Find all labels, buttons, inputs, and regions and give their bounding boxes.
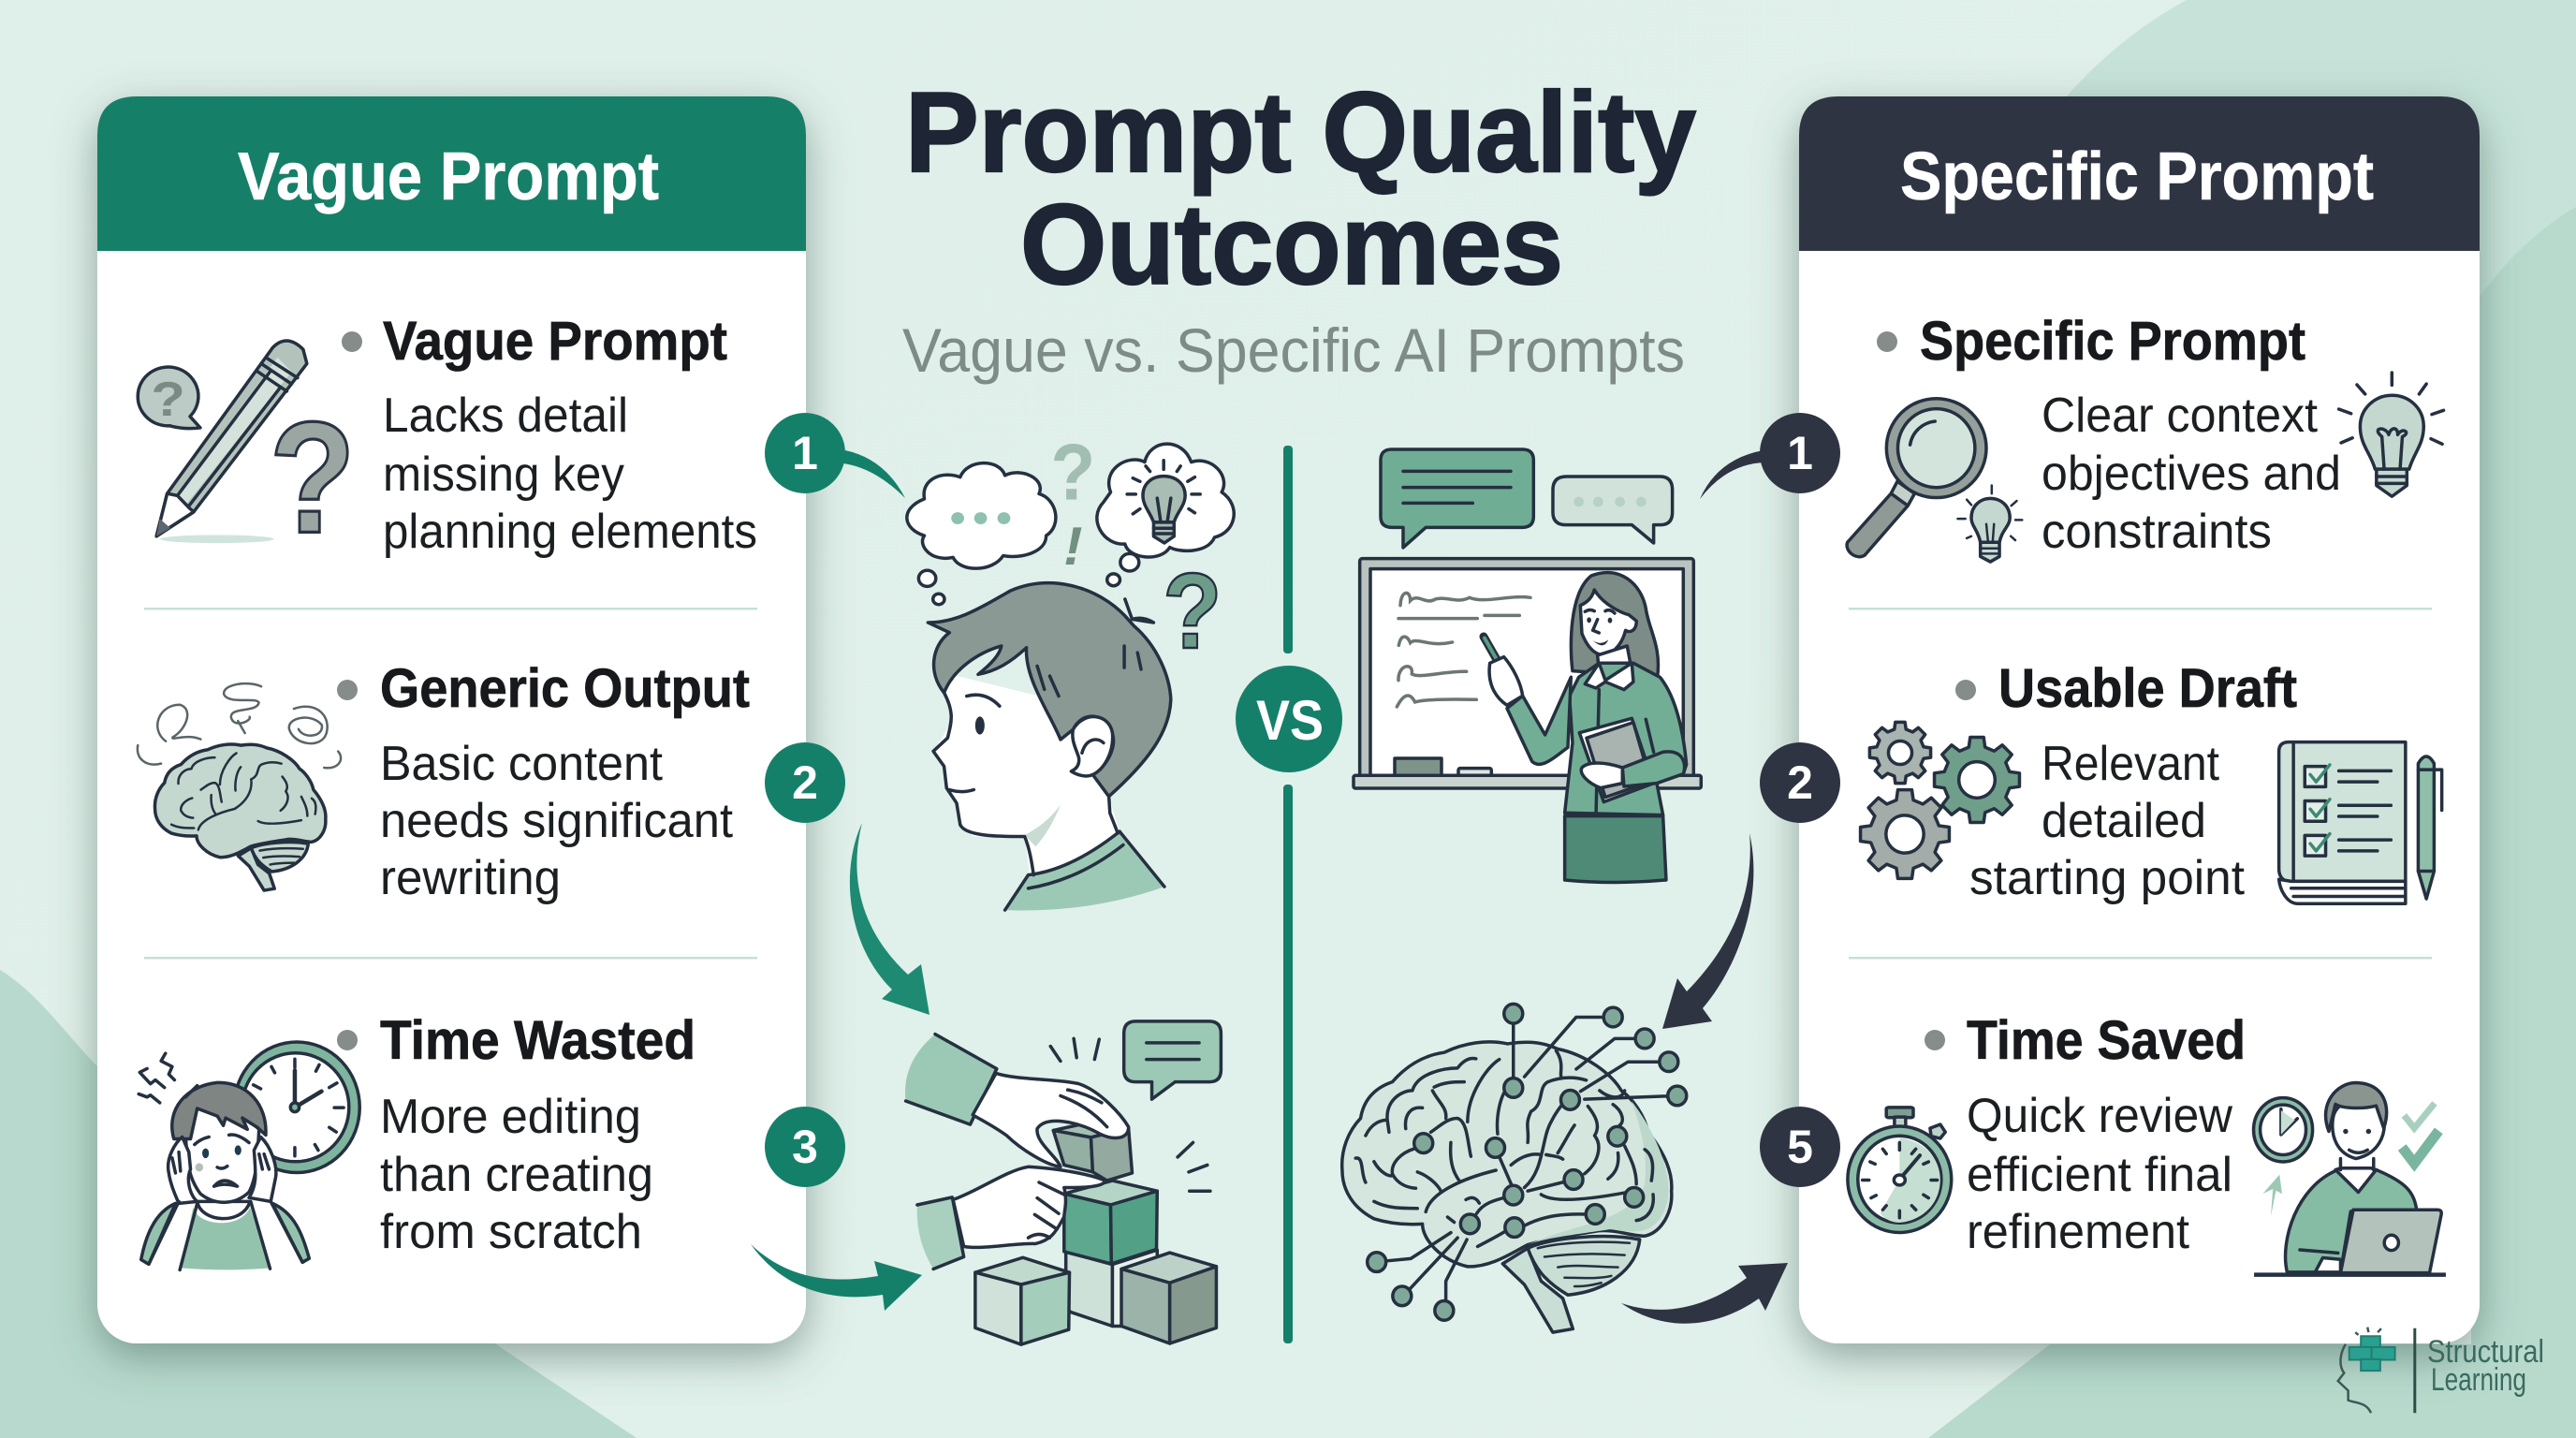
- item: usable draft text: starting point: [1969, 851, 2246, 905]
- item: time wasted text: [337, 1010, 695, 1259]
- divider lines: [144, 608, 757, 959]
- speech bubble small: [1553, 477, 1673, 543]
- badge: left 3: 3: [792, 1121, 818, 1173]
- title: Outcomes: [1020, 181, 1563, 308]
- badge: right 5: 5: [1787, 1121, 1813, 1173]
- item: time wasted text: Time Wasted: [380, 1010, 695, 1071]
- VS badge: VS: [1256, 689, 1324, 752]
- badge: right 1: 1: [1787, 427, 1813, 479]
- item: usable draft text: Usable Draft: [1998, 658, 2297, 719]
- illustration: thinking boy: ?: [1163, 552, 1222, 671]
- item: generic output text: [337, 658, 750, 905]
- lower hand: [917, 1167, 1105, 1269]
- illustration: connected brain: [1342, 1004, 1687, 1332]
- item: vague prompt text: Vague Prompt: [383, 311, 727, 372]
- badge: left 1: [765, 413, 845, 493]
- VS badge: [1236, 666, 1342, 772]
- panel header: vague prompt: [97, 96, 806, 251]
- item: vague prompt text: [342, 311, 757, 559]
- item: vague prompt text: missing key: [383, 448, 624, 502]
- item: usable draft text: [1955, 658, 2297, 905]
- badge: left 2: [765, 742, 845, 823]
- icon: pencil with question marks: ?: [270, 389, 356, 566]
- title: [905, 68, 1696, 308]
- cube: bottom left: [975, 1257, 1070, 1344]
- item: specific prompt text: constraints: [2042, 505, 2272, 559]
- icon: stopwatch: [1848, 1108, 1952, 1233]
- icon: magnifier and lightbulbs: [1847, 373, 2444, 562]
- item: specific prompt text: Clear context: [2042, 389, 2319, 443]
- arrow: right 2 to brain: [1662, 833, 1753, 1029]
- logo: structural learning: Learning: [2431, 1362, 2526, 1398]
- network nodes: [1368, 1004, 1687, 1320]
- icon: pencil with question marks: [138, 341, 356, 566]
- logo: structural learning: Structural: [2427, 1334, 2544, 1370]
- arrow: left 3 to blocks: [751, 1244, 922, 1311]
- item: usable draft text: detailed: [2042, 794, 2206, 848]
- panel header: vague prompt: Vague Prompt: [238, 139, 659, 214]
- badge: right 5: [1760, 1107, 1840, 1187]
- icon: notebook and pen: [2279, 742, 2442, 903]
- thought cloud with dots: [907, 463, 1056, 605]
- item: time wasted text: than creating: [380, 1148, 653, 1202]
- icon: gears: [1861, 722, 2019, 878]
- boy shirt: [1005, 831, 1164, 910]
- badge: right 2: [1760, 742, 1840, 823]
- speech bubble: [1124, 1021, 1221, 1099]
- item: specific prompt text: [1877, 311, 2341, 559]
- panel: specific prompt: [1799, 96, 2480, 1343]
- icon: stressed person and clock: [139, 1042, 359, 1269]
- speech bubble large: [1381, 449, 1533, 548]
- panel header: specific prompt: [1799, 96, 2480, 251]
- illustration: thinking boy: !: [1063, 516, 1083, 577]
- center divider with VS: [1236, 446, 1342, 1343]
- item: time saved text: refinement: [1967, 1205, 2190, 1259]
- logo: structural learning: [2338, 1328, 2544, 1413]
- icon: pencil with question marks: ?: [151, 372, 185, 426]
- item: specific prompt text: Specific Prompt: [1920, 311, 2305, 372]
- panel header: specific prompt: Specific Prompt: [1900, 139, 2374, 214]
- subtitle: Vague vs. Specific AI Prompts: [902, 315, 1685, 385]
- badge: left 2: 2: [792, 756, 818, 809]
- badge: right 1: [1760, 413, 1840, 493]
- item: specific prompt text: objectives and: [2042, 447, 2341, 501]
- item: usable draft text: Relevant: [2042, 737, 2220, 791]
- item: generic output text: needs significant: [380, 794, 734, 848]
- item: generic output text: rewriting: [380, 851, 561, 905]
- item: time saved text: efficient final: [1967, 1148, 2232, 1202]
- panel: vague prompt: [97, 96, 806, 1343]
- teacher: [1484, 573, 1687, 882]
- item: time wasted text: More editing: [380, 1090, 641, 1144]
- arrow: left 2 to blocks: [850, 823, 929, 1015]
- badge: left 3: [765, 1107, 845, 1187]
- icon: confused brain: [138, 683, 341, 890]
- badge: left 1: 1: [792, 427, 818, 479]
- item: vague prompt text: planning elements: [383, 505, 757, 559]
- item: time saved text: Time Saved: [1967, 1010, 2246, 1071]
- thought cloud with lightbulb: [1097, 444, 1234, 586]
- icon: man at laptop with clock and checks: [2254, 1083, 2446, 1275]
- illustration: thinking boy: [907, 427, 1234, 910]
- divider lines: [1849, 608, 2432, 959]
- illustration: teacher at whiteboard: [1354, 449, 1701, 882]
- cube: light back: [1066, 1252, 1112, 1326]
- item: generic output text: Basic content: [380, 737, 664, 791]
- cube: green: [1064, 1181, 1157, 1264]
- arrow: left 1 to thought: [843, 450, 905, 498]
- item: time saved text: [1925, 1010, 2246, 1259]
- title: Prompt Quality: [905, 68, 1696, 196]
- arrow: right 1 to teacher: [1700, 450, 1765, 499]
- boy head: [928, 583, 1171, 910]
- item: vague prompt text: Lacks detail: [383, 389, 628, 443]
- clock: [234, 1042, 359, 1173]
- cube: bottom right: [1121, 1253, 1216, 1343]
- item: time wasted text: from scratch: [380, 1205, 642, 1259]
- badge: right 2: 2: [1787, 756, 1813, 809]
- upper hand: [905, 1034, 1129, 1167]
- cube: top: [1053, 1124, 1132, 1181]
- whiteboard: [1354, 559, 1701, 788]
- item: generic output text: Generic Output: [380, 658, 750, 719]
- illustration: thinking boy: ?: [1050, 427, 1095, 517]
- illustration: hands and blocks: [905, 1021, 1221, 1344]
- item: time saved text: Quick review: [1967, 1089, 2232, 1143]
- arrow: right 3 to panel: [1621, 1263, 1788, 1324]
- person: [139, 1053, 309, 1269]
